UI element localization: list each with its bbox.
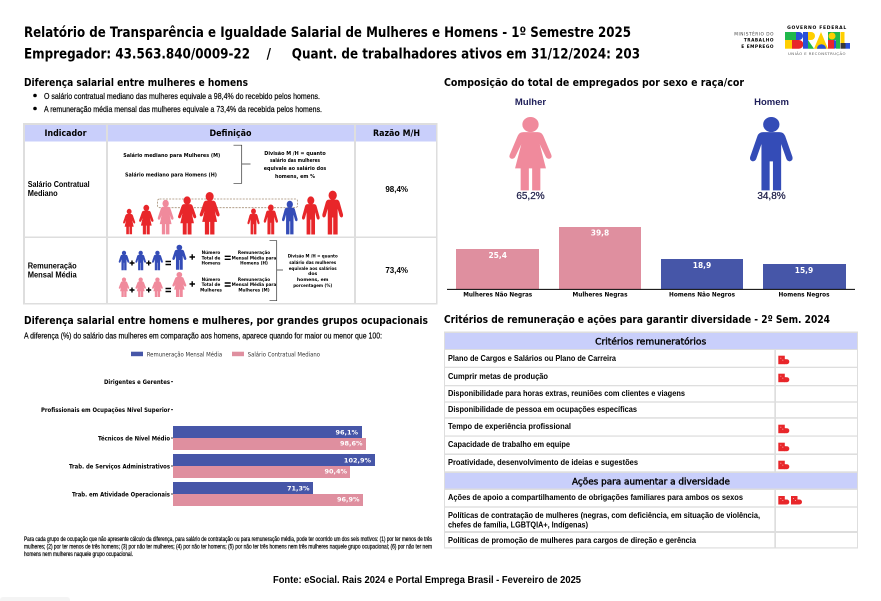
table header: Razão M/H — [373, 129, 420, 139]
table header: Indicador — [44, 129, 87, 139]
bullet list: O salário contratual mediano das mulheres equivale a 98,4% do recebido pelos homens. — [44, 91, 320, 101]
actions list: Ações de apoio a compartilhamento de obrigações familiares para ambos os sexos — [448, 493, 744, 502]
heading: composição: Composição do total de empregados por sexo e raça/cor — [444, 76, 744, 89]
logo: governo federal brasil: MINISTÉRIO DO — [734, 30, 774, 38]
row: remuneração mensal média: 73,4% — [385, 266, 408, 275]
table header: Definição — [210, 129, 252, 139]
bar chart: sexo e raça/cor: Homens Negros — [778, 292, 830, 298]
row: salário contratual mediano: salário das mulheres — [270, 157, 320, 164]
title: Empregador: 43.563.840/0009-22 / Quant. de trabalhadores ativos em 31/12/2024: 203 — [24, 46, 640, 62]
row: salário contratual mediano: homens, em % — [275, 174, 315, 180]
illustration: remuneração média equations: Número — [202, 277, 220, 282]
footnote — [24, 537, 432, 558]
header: critérios remuneratórios — [445, 333, 857, 349]
icons: ações marcadas — [778, 496, 802, 504]
row: salário contratual mediano: Salário Contratual — [28, 180, 90, 189]
row: salário contratual mediano — [28, 145, 408, 198]
bullet list: A remuneração média mensal das mulheres equivale a 73,4% da recebida pelos homens. — [44, 104, 322, 114]
criteria list: Disponibilidade para horas extras, reuniões com clientes e viagens — [448, 389, 686, 398]
bar chart: grupos ocupacionais: Técnicos de Nível Médio — [98, 435, 170, 442]
row: salário contratual mediano: 98,4% — [385, 185, 408, 194]
title: Relatório de Transparência e Igualdade Salarial de Mulheres e Homens - 1º Semestre 2025 — [24, 25, 631, 41]
illustration: remuneração média equations: porcentagem (%) — [293, 283, 332, 289]
header: critérios remuneratórios: Critérios remuneratórios — [595, 336, 707, 348]
bar chart: sexo e raça/cor: 18,9 — [693, 261, 711, 270]
bar chart: sexo e raça/cor: 15,9 — [795, 266, 813, 275]
bar chart: sexo e raça/cor: Mulheres Não Negras — [463, 292, 533, 298]
table: indicadores — [23, 123, 438, 304]
icon: mulher: Mulher — [515, 97, 546, 108]
legend: Salário Contratual Mediano — [248, 352, 320, 358]
illustration: remuneração média equations: Remuneração — [238, 250, 270, 255]
criteria list — [448, 354, 686, 467]
actions list — [448, 493, 760, 545]
header: ações para aumentar a diversidade — [445, 473, 857, 488]
footnote: homens nem mulheres naquele grupo ocupacional. — [24, 552, 133, 558]
bar chart: grupos ocupacionais: 71,3% — [287, 484, 310, 492]
title — [24, 25, 640, 62]
illustration: remuneração média equations: Mensal Média para — [232, 255, 276, 260]
bar chart: grupos ocupacionais: 90,4% — [324, 468, 347, 476]
source line: Fonte: eSocial. Rais 2024 e Portal Emprega Brasil - Fevereiro de 2025 — [273, 574, 581, 586]
criteria list: Proatividade, desenvolvimento de ideias e sugestões — [448, 458, 639, 467]
heading: diferença salarial: Diferença salarial entre mulheres e homens — [24, 76, 248, 89]
table: critérios e ações — [444, 332, 858, 548]
subtitle: grupos ocupacionais: A diferença (%) do salário das mulheres em comparação aos homens, aparece quando for maior ou menor que 100: — [24, 330, 382, 340]
bar chart: sexo e raça/cor: Mulheres Negras — [572, 292, 628, 298]
illustration: remuneração média equations: Total de — [202, 255, 221, 260]
bar chart: grupos ocupacionais: Trab. em Atividade Operacionais — [72, 491, 170, 498]
illustration: remuneração média equations: Número — [202, 250, 220, 255]
row: remuneração mensal média — [28, 262, 408, 280]
table header — [25, 125, 436, 142]
bar chart: grupos ocupacionais: 98,6% — [340, 440, 363, 448]
row: salário contratual mediano: Salário mediano para Mulheres (M) — [123, 152, 220, 159]
bar chart: sexo e raça/cor: Homens Não Negros — [669, 292, 735, 298]
illustration: remuneração média equations: dos — [308, 271, 318, 277]
illustration: remuneração média equations: Total de — [202, 282, 221, 287]
row: salário contratual mediano: equivale ao salário dos — [264, 165, 326, 172]
bullet list — [33, 91, 322, 114]
logo: governo federal brasil: E EMPREGO — [741, 44, 774, 50]
illustration: salário mediano people — [123, 191, 343, 234]
criteria list: Capacidade de trabalho em equipe — [448, 440, 570, 449]
actions list: Políticas de contratação de mulheres (negras, com deficiência, em situação de violência, — [448, 511, 760, 520]
bar chart: grupos ocupacionais: 102,9% — [344, 456, 371, 464]
bar chart: grupos ocupacionais: 96,1% — [335, 428, 358, 436]
criteria list: Disponibilidade de pessoa em ocupações específicas — [448, 405, 638, 414]
logo: governo federal brasil — [734, 25, 850, 56]
footnote: mulheres; (2) por ter menos de três homens; (3) por não ter mulheres; (4) por não ter homens; (5) por não ter três homens nem três mulheres naquele grupo ocupacional; (6) por não ter nem — [24, 544, 432, 550]
illustration: remuneração média equations: Mulheres — [200, 287, 222, 292]
logo: governo federal brasil: TRABALHO — [744, 38, 774, 44]
icon: mulher — [510, 97, 551, 202]
actions list: chefes de família, LGBTQIA+, Indígenas) — [448, 520, 588, 530]
bar chart: grupos ocupacionais: Profissionais em Ocupações Nível Superior — [41, 407, 170, 414]
legend: Remuneração Mensal Média — [147, 352, 222, 358]
icon: homem — [750, 97, 792, 202]
legend — [131, 352, 320, 358]
row: salário contratual mediano: Mediano — [28, 189, 58, 198]
illustration: remuneração média equations: salário das mulheres — [289, 259, 336, 266]
bar chart: sexo e raça/cor: 39,8 — [591, 228, 609, 238]
bar chart: grupos ocupacionais — [41, 379, 375, 506]
illustration: remuneração média equations: Homens (H) — [240, 261, 268, 266]
criteria list: Cumprir metas de produção — [448, 372, 548, 381]
criteria list: Plano de Cargos e Salários ou Plano de Carreira — [448, 354, 616, 363]
row: salário contratual mediano: Divisão M /H = quanto — [264, 151, 326, 157]
row: salário contratual mediano: Salário mediano para Homens (H) — [125, 172, 217, 178]
illustration: remuneração média equations: Remuneração — [238, 277, 270, 282]
footnote: Para cada grupo de ocupação que não apresente cálculo da diferença, para salário de contratação ou para remuneração média, pode ter ocorrido um dos seis motivos: (1) por ter menos de três — [24, 537, 432, 543]
icons: critérios marcados — [778, 356, 789, 469]
illustration: remuneração média equations: Homens — [201, 261, 221, 266]
actions list: Políticas de promoção de mulheres para cargos de direção e gerência — [448, 536, 697, 545]
row: remuneração mensal média: Mensal Média — [28, 270, 77, 280]
header: ações para aumentar a diversidade: Ações para aumentar a diversidade — [572, 478, 730, 488]
heading: grupos ocupacionais: Diferença salarial entre homens e mulheres, por grandes grupos ocupacionais — [24, 314, 428, 327]
bar chart: sexo e raça/cor — [447, 227, 855, 298]
criteria list: Tempo de experiência profissional — [448, 422, 571, 431]
illustration: remuneração média equations: Mulheres (M) — [238, 287, 270, 292]
illustration: remuneração média equations: homens, em — [297, 277, 329, 283]
icon: mulher: 65,2% — [516, 191, 545, 202]
illustration: remuneração média equations: Divisão M /H = quanto — [288, 254, 338, 260]
logo: governo federal brasil: GOVERNO FEDERAL — [787, 25, 847, 31]
bar chart: grupos ocupacionais: Trab. de Serviços Administrativos — [69, 463, 170, 470]
bar chart: grupos ocupacionais: 96,9% — [337, 496, 360, 504]
illustration: remuneração média equations: equivale aos salários — [289, 265, 337, 272]
row: remuneração mensal média: Remuneração — [28, 262, 77, 270]
illustration: remuneração média equations — [119, 241, 338, 301]
icon: homem: 34,8% — [757, 191, 786, 202]
bar chart: grupos ocupacionais: Dirigentes e Gerentes — [104, 379, 170, 386]
illustration: remuneração média equations: Mensal Média para — [232, 282, 276, 287]
bar chart: sexo e raça/cor: 25,4 — [488, 251, 507, 260]
icon: homem: Homem — [754, 97, 789, 108]
logo: governo federal brasil: UNIÃO E RECONSTRUÇÃO — [788, 51, 846, 56]
